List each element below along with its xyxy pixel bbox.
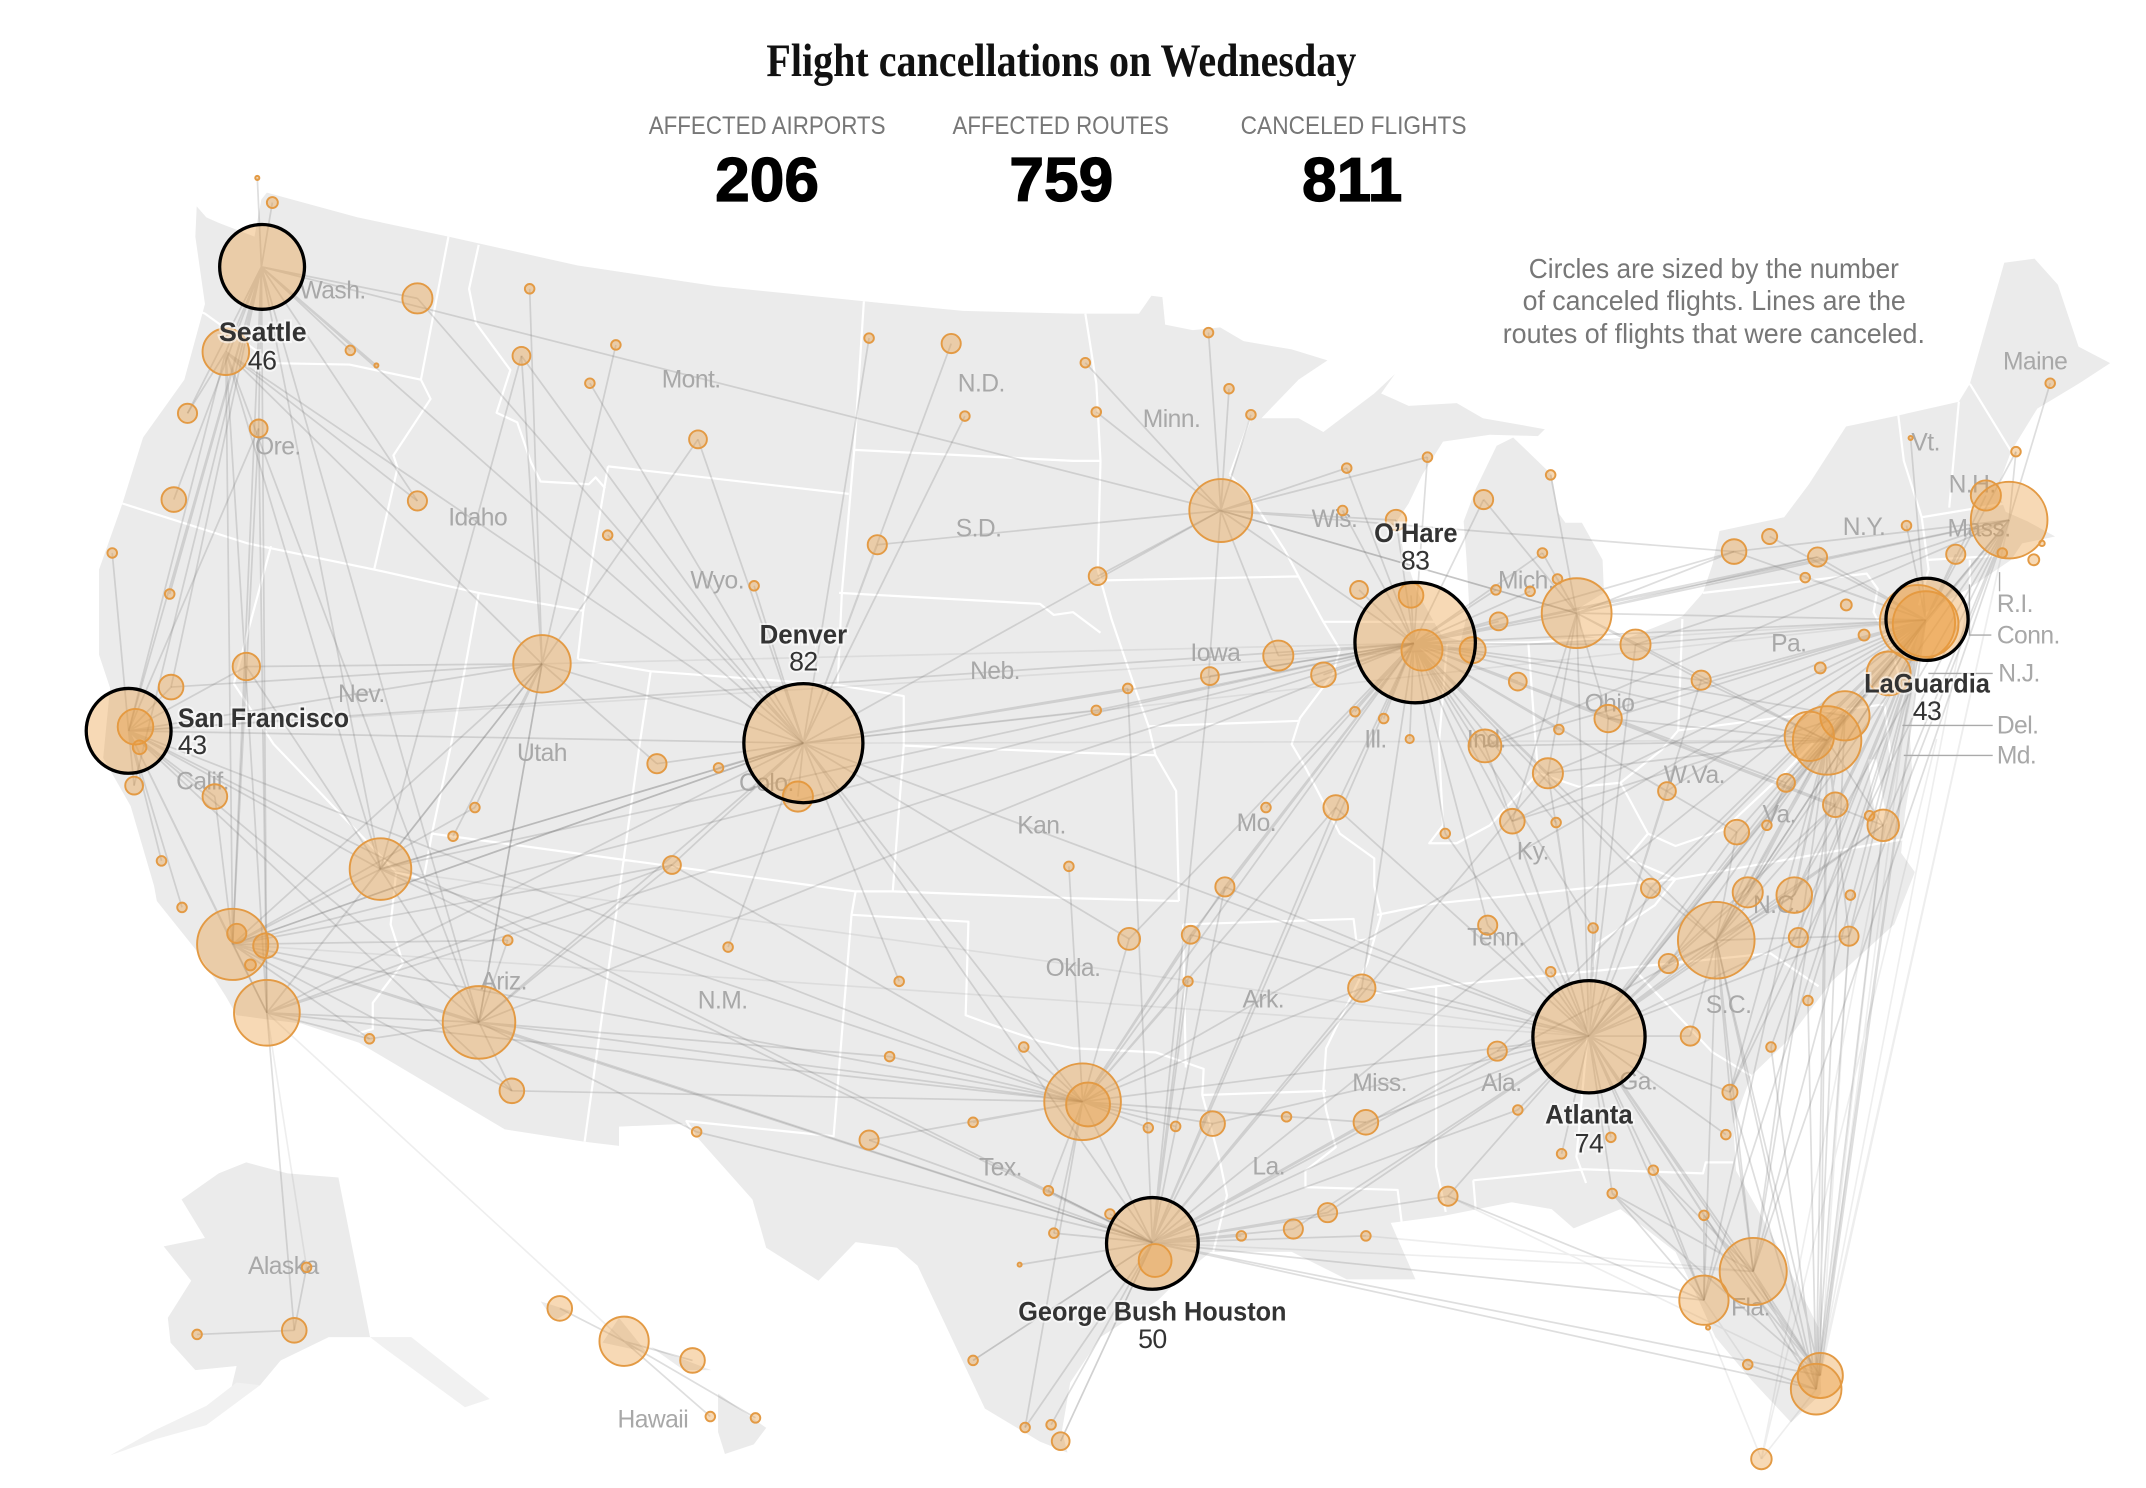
- hub: Denver: [744, 619, 863, 803]
- explanatory note: of canceled flights. Lines are the: [1523, 285, 1906, 316]
- state labels: Del.: [1997, 713, 2038, 740]
- state labels: W.Va.: [1664, 762, 1725, 789]
- hub: George Bush Houston: 50: [1138, 1324, 1167, 1354]
- hub: Seattle: 46: [248, 346, 276, 376]
- hub: Denver: Denver: [760, 619, 847, 649]
- stat: affected routes: 759: [1009, 146, 1113, 215]
- explanatory note: routes of flights that were canceled.: [1503, 318, 1925, 349]
- state labels: Ala.: [1481, 1070, 1522, 1097]
- hub: LaGuardia: [1864, 578, 1990, 726]
- state labels: Iowa: [1190, 640, 1241, 667]
- state labels: Ore.: [255, 433, 301, 460]
- state labels: Mich.: [1498, 568, 1554, 595]
- hub: O'Hare: [1355, 518, 1475, 703]
- stat: affected routes: [953, 113, 1169, 215]
- state labels: Vt.: [1911, 429, 1940, 456]
- hub: Denver: 82: [789, 647, 818, 677]
- state labels: Fla.: [1731, 1294, 1770, 1321]
- state labels: Ohio: [1585, 691, 1634, 718]
- state labels: Miss.: [1352, 1070, 1407, 1097]
- state labels: Ariz.: [480, 969, 527, 996]
- state labels: Ark.: [1242, 986, 1284, 1013]
- state labels: Mass.: [1948, 516, 2010, 543]
- state labels: Ky.: [1517, 839, 1549, 866]
- stat: affected airports: AFFECTED AIRPORTS: [649, 113, 885, 140]
- state labels: Minn.: [1143, 406, 1200, 433]
- hub: Atlanta: Atlanta: [1545, 1100, 1633, 1130]
- hub: San Francisco: [86, 688, 349, 773]
- state labels: S.C.: [1706, 992, 1751, 1019]
- hub: LaGuardia: 43: [1913, 696, 1941, 726]
- state labels: Pa.: [1771, 630, 1806, 657]
- state labels: S.D.: [956, 516, 1001, 543]
- state labels: Ind.: [1467, 726, 1506, 753]
- state labels: Ill.: [1364, 726, 1387, 753]
- state labels: Conn.: [1997, 622, 2060, 649]
- hub: San Francisco: San Francisco: [178, 703, 349, 733]
- Alaska land: [164, 1162, 370, 1406]
- route lines between airports: [112, 178, 2050, 1459]
- hub: O'Hare: 83: [1401, 545, 1429, 575]
- Hawaii islands: [541, 1301, 766, 1454]
- state labels: Idaho: [448, 505, 507, 532]
- state labels: Maine: [2003, 349, 2067, 376]
- hub: Seattle: Seattle: [219, 317, 307, 347]
- hub: George Bush Houston: George Bush Houston: [1018, 1297, 1287, 1327]
- state labels: [176, 277, 2067, 1433]
- state labels: Alaska: [248, 1253, 319, 1280]
- state labels: R.I.: [1997, 591, 2033, 618]
- stat: canceled flights: CANCELED FLIGHTS: [1241, 113, 1466, 140]
- state labels: Md.: [1997, 743, 2036, 770]
- hub: O'Hare: O’Hare: [1374, 518, 1458, 548]
- explanatory note: Circles are sized by the number: [1529, 253, 1899, 284]
- state borders: [122, 237, 2011, 1252]
- state labels: N.M.: [698, 988, 748, 1015]
- state labels: Colo.: [739, 770, 794, 797]
- explanatory note: [1503, 253, 1925, 349]
- state labels: Neb.: [970, 658, 1020, 685]
- state labels: N.D.: [958, 370, 1005, 397]
- state labels: Mont.: [662, 366, 721, 393]
- stat: canceled flights: [1241, 113, 1466, 215]
- state labels: La.: [1252, 1153, 1285, 1180]
- stat: affected routes: AFFECTED ROUTES: [953, 113, 1169, 140]
- state labels: Wis.: [1312, 506, 1357, 533]
- state labels: N.C.: [1753, 892, 1800, 919]
- hub: Atlanta: 74: [1575, 1128, 1604, 1158]
- state labels: Hawaii: [618, 1406, 688, 1433]
- stat: affected airports: 206: [715, 146, 819, 215]
- hub: George Bush Houston: [1018, 1198, 1287, 1354]
- state labels: Calif.: [176, 769, 229, 796]
- state labels: Utah: [517, 740, 567, 767]
- Chesapeake Bay: [1868, 759, 1887, 831]
- leader lines for northeast state labels: [1902, 572, 2000, 755]
- stat: affected airports: [649, 113, 885, 215]
- state labels: Nev.: [338, 681, 385, 708]
- state labels: Okla.: [1046, 955, 1100, 982]
- hub: Seattle: [219, 224, 307, 376]
- state labels: Ga.: [1619, 1068, 1657, 1095]
- airport circles sized by canceled flights: [107, 176, 2055, 1469]
- title: Flight cancellations on Wednesday: [766, 36, 1356, 87]
- state labels: N.Y.: [1843, 514, 1885, 541]
- state labels: N.H.: [1949, 472, 1996, 499]
- hub: LaGuardia: LaGuardia: [1864, 669, 1990, 699]
- state labels: Kan.: [1017, 813, 1066, 840]
- map: land shapes and state borders: [99, 193, 2110, 1455]
- state labels: Wash.: [300, 277, 366, 304]
- state labels: Mo.: [1237, 810, 1276, 837]
- hub: Atlanta: [1533, 981, 1645, 1158]
- state labels: Tenn.: [1467, 925, 1525, 952]
- state labels: Wyo.: [690, 568, 744, 595]
- contiguous United States land: [99, 193, 2110, 1453]
- state labels: Tex.: [979, 1155, 1022, 1182]
- Alaska peninsula and panhandle islands: [110, 1337, 490, 1455]
- state labels: Va.: [1762, 802, 1796, 829]
- stat: canceled flights: 811: [1302, 146, 1402, 215]
- hub: San Francisco: 43: [178, 730, 206, 760]
- state labels: N.J.: [1998, 661, 2040, 688]
